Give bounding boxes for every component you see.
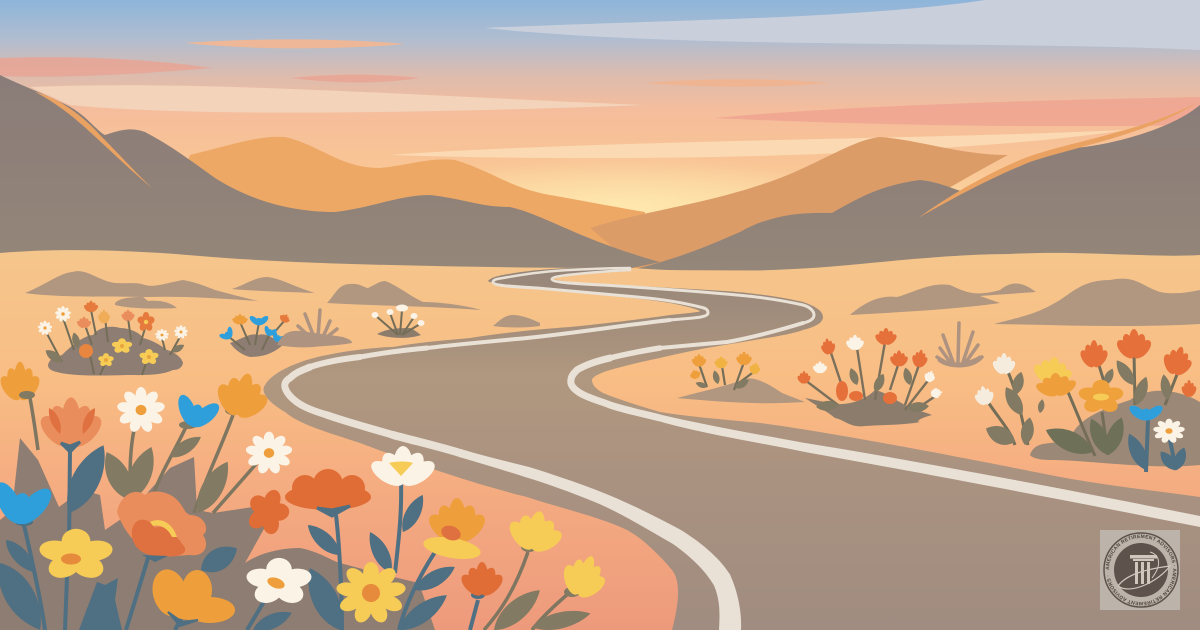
flower: white daisy <box>116 387 166 433</box>
flower: blue tulip <box>168 390 225 436</box>
distant rocks <box>25 271 1200 403</box>
olive flower stems <box>30 398 569 630</box>
logo column icon <box>1118 552 1170 589</box>
white flower tuft <box>372 304 424 338</box>
foreground flower heads <box>0 362 615 626</box>
small blue and orange bush <box>217 311 292 357</box>
flower: jagged red bloom <box>239 483 297 542</box>
clouds <box>0 0 1200 158</box>
flower: coral tulip <box>36 397 106 453</box>
winding road <box>264 267 1200 630</box>
flower: yellow bloom <box>36 529 116 582</box>
flower: blue tulip left <box>0 477 59 532</box>
grey mountains <box>0 75 1200 272</box>
flower: yellow daisy <box>335 562 407 625</box>
flower: white bloom lower <box>243 558 315 607</box>
foreground flower stems <box>24 450 478 630</box>
flower: orange tulip far left <box>0 362 42 405</box>
flower: red flat bloom <box>285 469 371 516</box>
flower: large coral bloom <box>117 492 206 562</box>
flower: white bloom with yellow center <box>366 446 440 491</box>
logo: American Retirement Advisors <box>1100 530 1180 610</box>
left white edge line <box>285 268 741 630</box>
agave plant <box>937 323 982 365</box>
far orange mountains <box>150 137 1008 270</box>
right white edge line <box>552 270 1200 527</box>
road surface <box>264 267 1200 630</box>
foreground leaves <box>0 432 592 630</box>
right wildflower cluster <box>972 329 1200 473</box>
flower: red tulip <box>458 562 506 600</box>
sky <box>0 0 1200 255</box>
central right wildflower bush <box>797 328 944 426</box>
logo ring text: AMERICAN RETIREMENT ADVISORS · AMERICAN RETIREMENT ADVISORS · <box>1106 534 1176 606</box>
far left wildflower bush <box>38 301 188 376</box>
small orange flower cluster <box>688 352 762 391</box>
flower: white daisy right <box>245 432 293 475</box>
foreground grey foliage mass <box>0 438 435 630</box>
small agave and mound <box>277 310 352 347</box>
flower: yellow tulip right <box>553 548 615 609</box>
flower: orange tulip upper <box>207 366 277 429</box>
mountain rim light <box>35 92 1198 218</box>
flower: orange and yellow bloom <box>422 498 489 563</box>
flower: big orange bloom <box>147 565 235 626</box>
desert ground <box>0 250 1200 630</box>
flower: yellow tulip <box>501 505 570 562</box>
